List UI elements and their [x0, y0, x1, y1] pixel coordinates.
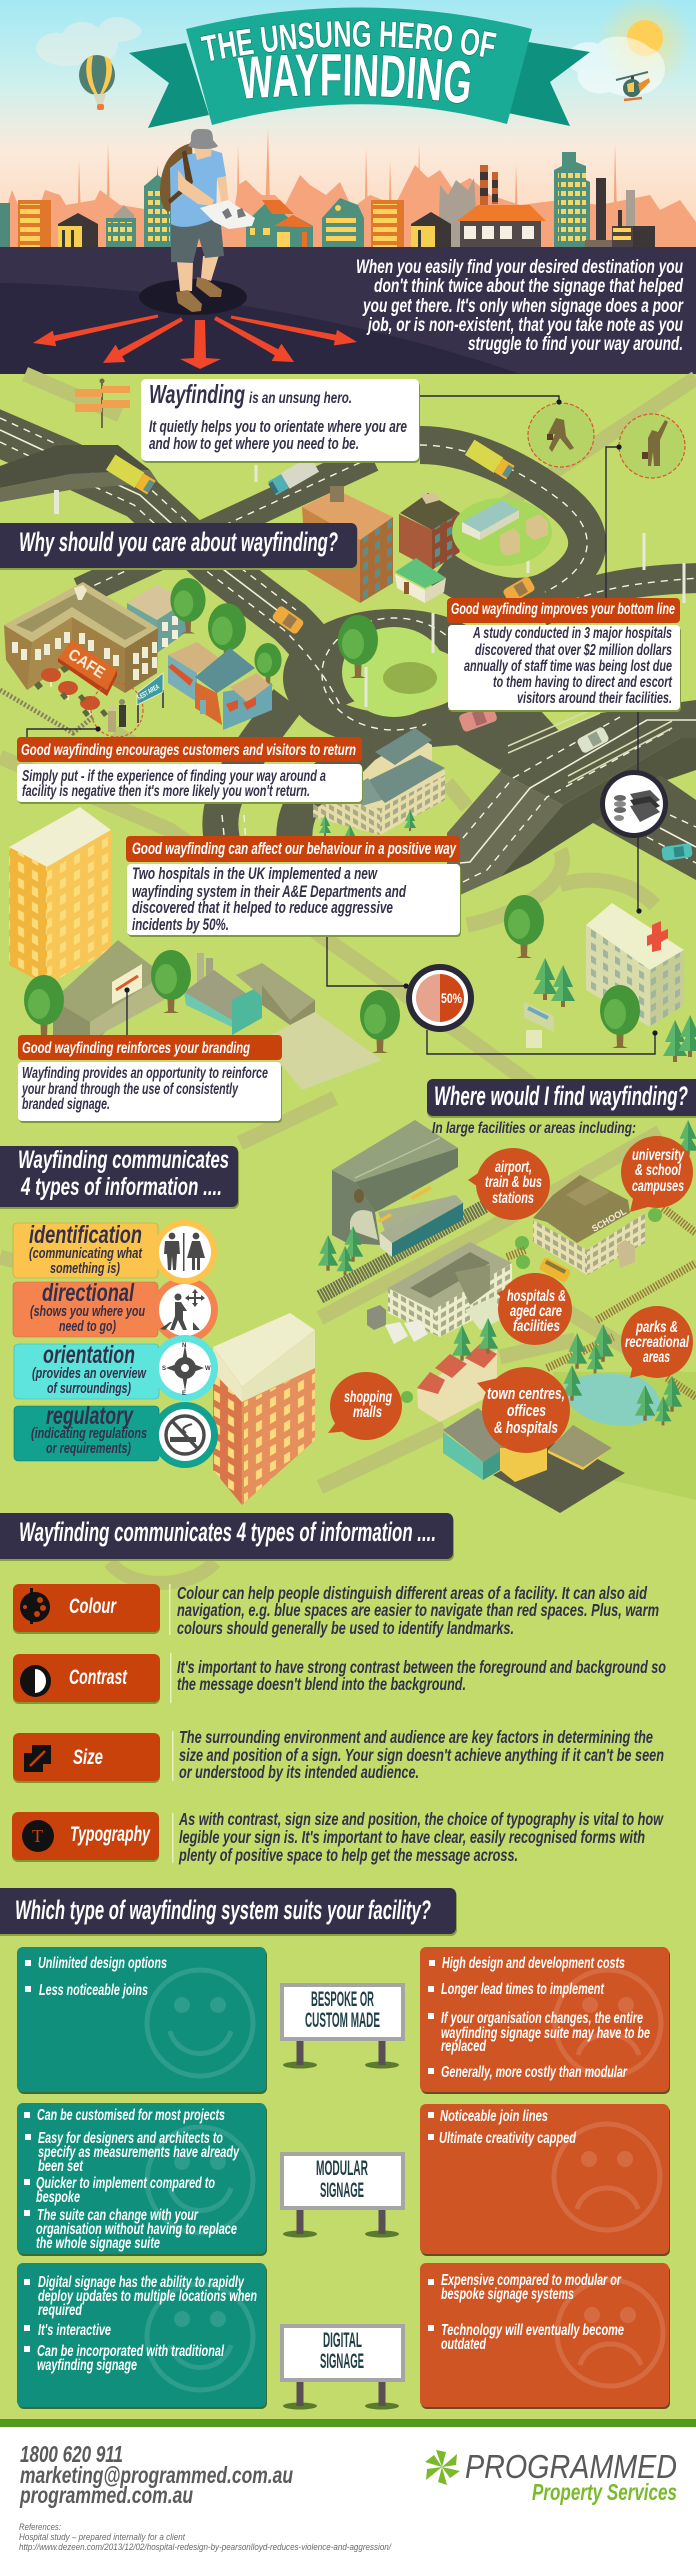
hospital [586, 903, 684, 1027]
row: regulatory: regulatory [46, 1402, 134, 1430]
small round trees [401, 1208, 662, 1403]
callout body [149, 418, 407, 453]
dashed circle at cafe [91, 683, 143, 737]
bubble: shopping: shopping [344, 1389, 392, 1406]
row: contrast [13, 1653, 666, 1704]
sign: bespoke [282, 1985, 403, 2068]
lamps [256, 465, 684, 707]
panel: modular pros: the whole signage suite [36, 2235, 160, 2252]
building: orange block 2 [371, 200, 404, 247]
panel: modular pros: been set [38, 2158, 83, 2175]
row: orientation [14, 1341, 159, 1399]
callout: behaviour: Good wayfinding can affect our behaviour in a positive way [132, 840, 457, 858]
connector: cafe to callout [27, 726, 101, 737]
icon: no smoking [152, 1402, 218, 1468]
train [380, 1195, 463, 1257]
callout: encourages return: Good wayfinding encourages customers and visitors to return [21, 742, 356, 759]
hall walls [313, 735, 445, 835]
bubble: shopping [328, 1372, 402, 1440]
callout: behaviour: Two hospitals in the UK implemented a new [132, 864, 378, 883]
row: directional: (shows you where you [30, 1303, 145, 1320]
pond [564, 1374, 660, 1426]
service station [443, 1408, 625, 1513]
corner shop [168, 642, 272, 730]
heading: wayfinding communicates 2 [0, 1513, 454, 1561]
building: teal block [322, 198, 364, 247]
orange tall building [213, 1313, 315, 1505]
sign: digital [282, 2326, 403, 2410]
sign: modular [282, 2154, 403, 2238]
green footer band [0, 2419, 696, 2427]
bubble: town centres [477, 1367, 570, 1453]
panel: digital pros: Digital signage has the ability to rapidly [38, 2274, 245, 2291]
bubble: shopping: malls [353, 1404, 382, 1421]
bubble: town centres: town centres, [487, 1384, 565, 1403]
callout: encourages return: facility is negative then it's more likely you won't return. [22, 783, 310, 800]
bubble: airport: train & bus [485, 1174, 542, 1191]
road: main diagonal [0, 430, 345, 705]
signpost [75, 378, 130, 428]
heading: why should you care: Why should you care about wayfinding? [19, 527, 338, 557]
connector: hero to man [419, 396, 562, 405]
icon: palette [20, 1588, 50, 1624]
callout: behaviour [126, 836, 461, 937]
bubble: airport: airport, [495, 1159, 532, 1176]
cloud left [36, 17, 142, 66]
station walls [332, 1170, 380, 1245]
callout body: It quietly helps you to orientate where you are [149, 418, 407, 436]
ground: dark plaza [0, 247, 696, 374]
sign: bespoke: BESPOKE OR [311, 1988, 374, 2011]
building: orange block 1 [18, 200, 51, 247]
panel: modular pros: The suite can change with your [37, 2207, 199, 2224]
hat [188, 129, 218, 149]
callout: branding: Good wayfinding reinforces your branding [22, 1040, 250, 1057]
sign: digital: SIGNAGE [320, 2350, 364, 2373]
hospital block [388, 1242, 512, 1337]
callout: encourages return: Simply put - if the experience of finding your way around a [22, 768, 326, 785]
icon: typography [22, 1820, 54, 1852]
icon: compass: S [162, 1366, 166, 1372]
cafe awning edge [58, 658, 117, 696]
man shadow [139, 279, 247, 315]
bubble: parks [621, 1306, 693, 1378]
row: regulatory [14, 1402, 159, 1461]
hospital walls [388, 1263, 512, 1337]
panel: modular cons: Noticeable join lines [440, 2108, 548, 2125]
row: directional: need to go) [59, 1318, 116, 1335]
heading: which type: Which type of wayfinding system suits your facility? [15, 1895, 431, 1925]
callout: branding: branded signage. [22, 1096, 110, 1113]
row: identification: something is) [50, 1260, 120, 1277]
bubble: town centres: offices [507, 1401, 546, 1420]
icon: typography: T [32, 1826, 43, 1846]
roundabout island [342, 627, 446, 717]
icon: contrast [20, 1665, 51, 1697]
footer contact: 1800 620 911 [20, 2441, 123, 2467]
panel: digital pros [17, 2263, 267, 2409]
panel: bespoke cons [420, 1947, 670, 2094]
heading: wayfinding communicates: 4 types of information .... [20, 1173, 222, 1201]
people at cafe [108, 699, 126, 732]
truck: yellow right [465, 440, 515, 480]
truck: grey and teal [267, 456, 319, 497]
footer references: http://www.dezeen.com/2013/12/02/hospital-redesign-by-pearsonlloyd-reduces-violence-and-aggression/ [19, 2542, 392, 2553]
neck [194, 146, 212, 160]
row: contrast: Contrast [69, 1666, 128, 1689]
intro text [356, 256, 684, 355]
canopy [548, 1425, 612, 1467]
background: green land [0, 374, 696, 2420]
footer contact [19, 2441, 293, 2508]
footer references [19, 2522, 392, 2553]
highway: ramp [447, 772, 563, 895]
footer references: Hospital study – prepared internally for a client [19, 2532, 185, 2543]
legs [177, 255, 219, 291]
connector: 50% to hospital [427, 1030, 658, 1054]
map marks [222, 208, 246, 219]
shorts [171, 215, 224, 263]
panel: modular pros: organisation without having to replace [36, 2221, 237, 2238]
icon: toilets [153, 1220, 217, 1284]
row: typography: Typography [70, 1823, 151, 1846]
school walls [533, 1213, 645, 1275]
helicopter [616, 72, 650, 100]
car park [262, 1012, 382, 1090]
shed roof [443, 1408, 517, 1462]
icon: compass: W [205, 1366, 211, 1372]
blue-grey corner building [127, 585, 185, 655]
icon: directional person [152, 1277, 218, 1343]
panel: digital cons [420, 2263, 670, 2409]
panel: digital cons: outdated [441, 2336, 487, 2353]
row: size: Size [73, 1746, 103, 1769]
cafe building [4, 582, 158, 696]
cafe walls [4, 617, 125, 693]
pines mid [319, 810, 696, 1062]
panel: digital cons: bespoke signage systems [441, 2286, 574, 2303]
ambulances [385, 1320, 428, 1344]
sign: bespoke: CUSTOM MADE [305, 2009, 380, 2032]
school porch [617, 1240, 635, 1268]
row: directional [13, 1279, 158, 1337]
cafe roof [4, 582, 158, 648]
bubble: hospitals: hospitals & [507, 1288, 566, 1305]
dark chimney [596, 178, 606, 242]
road: south lobes [220, 700, 288, 840]
building: large hall [313, 728, 445, 835]
building: teal house [246, 200, 294, 247]
backpack [160, 143, 194, 212]
bubble: parks: areas [643, 1349, 670, 1366]
row: orientation: orientation [43, 1341, 135, 1369]
panel: modular cons [420, 2104, 670, 2256]
icon: compass: E [182, 1391, 186, 1397]
shoes [176, 277, 222, 312]
platform [378, 1195, 464, 1240]
panel: modular pros: specify as measurements have already [38, 2144, 240, 2161]
map [200, 200, 255, 229]
fences [507, 1208, 696, 1397]
callout: branding: your brand through the use of consistently [21, 1081, 239, 1098]
hospital roof [388, 1242, 512, 1310]
money badge [600, 770, 668, 838]
bubble: town centres: & hospitals [494, 1418, 558, 1437]
callout: wayfinding intro [141, 379, 420, 463]
skyline silhouette [0, 128, 696, 247]
cafe sign: CAFE [65, 646, 108, 682]
row: size: or understood by its intended audience. [179, 1762, 419, 1782]
50% badge: 50% [441, 990, 462, 1006]
panel: bespoke pros: Unlimited design options [38, 1955, 167, 1972]
rest area sign: REST AREA [136, 684, 161, 702]
arm left [178, 170, 214, 206]
dashed circle: waving man [619, 414, 685, 478]
row: identification [13, 1221, 158, 1278]
sign: digital: DIGITAL [323, 2329, 362, 2352]
connector: behaviour to 50% [327, 935, 409, 989]
panel: bespoke cons: replaced [441, 2038, 487, 2055]
callout heading: Wayfinding [149, 379, 245, 409]
small pavilions [500, 514, 548, 556]
building: orange roof house [274, 215, 313, 247]
highway: deck [500, 700, 696, 805]
row: regulatory: (indicating regulations [31, 1425, 147, 1442]
icon: compass [152, 1335, 218, 1401]
heading: why should you care [0, 523, 358, 570]
heading: which type [0, 1888, 457, 1936]
footer references: References: [19, 2522, 61, 2533]
row: identification: identification [29, 1221, 142, 1249]
title: WAYFINDING [236, 53, 471, 104]
dark industrial building [585, 210, 655, 247]
connector: billboard to branding [124, 987, 130, 1035]
row: regulatory: or requirements) [46, 1440, 131, 1457]
title [200, 20, 498, 104]
arm right [217, 176, 229, 206]
hospital entrance [455, 1265, 490, 1305]
hot air balloon [79, 55, 115, 110]
callout: behaviour: discovered that it helped to reduce aggressive [132, 898, 393, 917]
railway [320, 1205, 487, 1297]
billboard near hospital [524, 1002, 554, 1048]
bubble: airport [468, 1148, 550, 1220]
fence by cafe [0, 690, 93, 733]
grass patch [553, 1372, 696, 1500]
heading: wayfinding communicates 2: Wayfinding communicates 4 types of information .... [19, 1517, 436, 1547]
building: yellow tower [9, 807, 111, 985]
panel: modular pros: Can be customised for most projects [37, 2107, 225, 2124]
rest area sign [136, 673, 164, 723]
row: orientation: of surroundings) [47, 1380, 131, 1397]
title: THE UNSUNG HERO OF [200, 20, 498, 62]
panel: bespoke pros: Less noticeable joins [39, 1982, 148, 1999]
backpack strap [168, 150, 193, 204]
panel: digital pros: deploy updates to multiple locations when [38, 2288, 257, 2305]
row: typography [12, 1809, 664, 1865]
panel: bespoke cons: Longer lead times to implement [441, 1981, 604, 1998]
hero man with map [160, 129, 255, 312]
trees mid [24, 895, 640, 1053]
sign: modular: SIGNAGE [320, 2179, 364, 2202]
cars [271, 576, 693, 861]
building: brick house [399, 493, 460, 570]
callout: branding [18, 1035, 282, 1123]
station arch [350, 1210, 378, 1240]
pines lower [318, 1120, 696, 1425]
row: orientation: (provides an overview [32, 1365, 147, 1382]
building: dark house 2 [411, 212, 451, 247]
utility box [367, 1305, 386, 1330]
shirt [170, 150, 226, 227]
panel: modular pros [17, 2103, 267, 2256]
callout: behaviour: wayfinding system in their A&E Departments and [132, 882, 406, 901]
building: dark house 1 [58, 213, 98, 247]
bubble: university [621, 1136, 693, 1212]
school bus [538, 1257, 572, 1283]
footer contact: programmed.com.au [19, 2482, 193, 2508]
building: green roof house [395, 558, 446, 603]
road: south-west diagonal [80, 457, 372, 592]
callout subheading: is an unsung hero. [249, 390, 352, 407]
station roof [332, 1120, 458, 1182]
cloud right [567, 36, 665, 96]
city buildings [0, 152, 655, 247]
ribbon banner centre [186, 8, 532, 125]
road: east branch [540, 578, 696, 612]
panel: digital pros: wayfinding signage [37, 2357, 137, 2374]
callout body: and how to get where you need to be. [149, 435, 359, 453]
trees by cafe [170, 578, 378, 686]
cafe tables [34, 665, 108, 717]
dashed circle: running man [528, 403, 594, 467]
panel: digital pros: It's interactive [38, 2322, 111, 2339]
building: tall teal tower [554, 152, 590, 247]
building: branded office [53, 940, 164, 1040]
building: brown tower [302, 486, 393, 603]
row: typography: plenty of positive space to help get the message across. [178, 1845, 518, 1865]
callout: behaviour: incidents by 50%. [132, 915, 229, 934]
row: contrast: the message doesn't blend into the background. [177, 1674, 466, 1694]
row: colour: Colour [69, 1595, 117, 1618]
row: size [13, 1727, 664, 1783]
station [332, 1120, 458, 1245]
50% badge [406, 964, 474, 1032]
smoke and grey towers [112, 178, 635, 247]
callout: encourages return [17, 737, 363, 804]
overpass bridge [0, 445, 158, 514]
row: identification: (communicating what [29, 1245, 143, 1262]
icon: size [24, 1745, 51, 1772]
footer contact: marketing@programmed.com.au [20, 2462, 293, 2488]
direction arrows [33, 314, 357, 369]
highway: south-east road [593, 775, 696, 880]
road: roundabout [300, 626, 488, 730]
building: blue-roof long block [462, 500, 519, 540]
road: loop [420, 445, 587, 597]
red-roof houses [417, 1344, 497, 1422]
cafe roof sign [74, 585, 87, 600]
road network [0, 418, 696, 850]
highway: underside wall [500, 738, 696, 877]
background: white footer [0, 2427, 696, 2560]
truck: yellow left [106, 455, 156, 495]
campus school [533, 1175, 645, 1275]
sun [597, 0, 693, 90]
hall roofs [375, 728, 432, 765]
bubble: airport: stations [492, 1190, 534, 1207]
footpaths [0, 374, 696, 1583]
platform markers [378, 1186, 432, 1223]
logo mark [425, 2450, 460, 2485]
ribbon banner tails [129, 42, 590, 128]
building: teal tower behind man [144, 165, 171, 247]
building: small teal [106, 218, 136, 247]
panel: modular pros: Easy for designers and architects to [38, 2130, 223, 2147]
highway: fences [508, 706, 672, 783]
road: dashed lines [0, 418, 296, 610]
panel: modular pros: bespoke [36, 2189, 80, 2206]
road: centre lines [0, 430, 290, 620]
panel: digital pros: Can be incorporated with traditional [37, 2343, 224, 2360]
connector: bottom line to hospital [636, 710, 642, 914]
factory [457, 205, 546, 247]
bubble: hospitals [497, 1273, 572, 1345]
grass island in loop [452, 498, 552, 566]
road towards interchange [420, 710, 560, 770]
heading: wayfinding communicates: Wayfinding communicates [18, 1146, 229, 1174]
school lettering: SCHOOL [590, 1206, 628, 1234]
panel: bespoke pros [17, 1947, 267, 2094]
callout: bottom line [447, 598, 681, 712]
icon: compass: N [182, 1343, 186, 1349]
background: sky [0, 0, 696, 250]
bubble: parks: parks & [635, 1319, 678, 1336]
panel: modular cons: Ultimate creativity capped [439, 2130, 577, 2147]
cafe windows [12, 632, 157, 680]
building: left edge [0, 203, 10, 247]
factory chimneys [480, 165, 498, 205]
heading: wayfinding communicates [0, 1146, 239, 1209]
row: colour [13, 1583, 659, 1638]
bubble: hospitals: aged care [510, 1303, 562, 1320]
station forecourt [493, 1440, 625, 1513]
yellow entrance [500, 1448, 547, 1482]
panel: modular pros: Quicker to implement compared to [36, 2175, 215, 2192]
panel: digital pros: required [38, 2302, 83, 2319]
highway: markings [460, 720, 696, 863]
shed wall [443, 1432, 483, 1480]
highway interchange [447, 700, 696, 895]
connector: waving man to bottom line [606, 444, 622, 598]
cafe awning [58, 640, 117, 690]
sign: modular: MODULAR [316, 2157, 368, 2180]
row: directional: directional [42, 1279, 135, 1307]
row: colour: colours should generally be used to identify landmarks. [177, 1618, 514, 1638]
callout: branding: Wayfinding provides an opportunity to reinforce [22, 1065, 268, 1082]
school roof [533, 1175, 630, 1243]
bubble: hospitals: facilities [513, 1318, 560, 1335]
building: teal factory [184, 953, 315, 1035]
